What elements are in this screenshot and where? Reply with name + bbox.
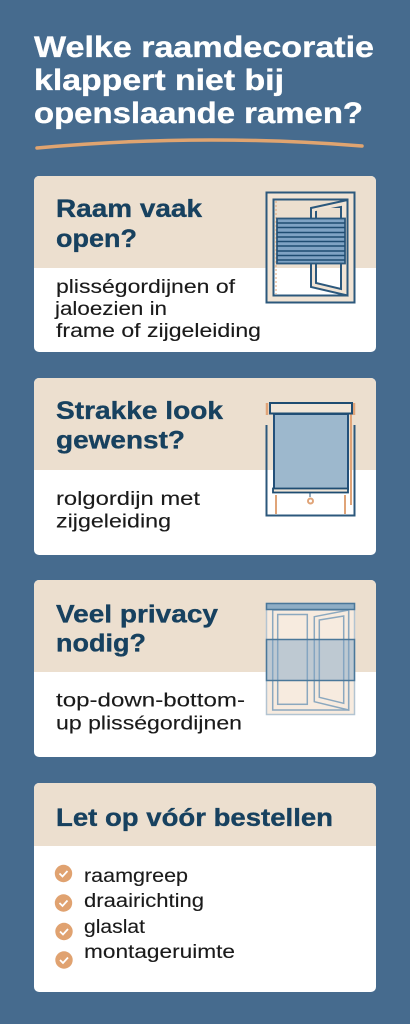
item: raamgreep: raamgreep	[84, 866, 188, 887]
text: plissegordijnen of jaloezien: plisségordijnen of	[56, 277, 236, 298]
heading: strakke look gewenst	[56, 397, 223, 454]
item: draairichting	[55, 891, 204, 912]
icon: top-down bottom-up blind	[266, 604, 354, 714]
item: glaslat: glaslat	[84, 917, 146, 938]
title: openslaande ramen?	[34, 97, 363, 130]
heading: strakke look gewenst: Strakke look	[56, 397, 223, 425]
title: Welke raamdecoratie	[34, 31, 374, 64]
panel: strakke look gewenst	[34, 378, 376, 555]
text: rolgordijn met zijgeleiding: zijgeleiding	[56, 512, 171, 532]
text: rolgordijn met zijgeleiding	[56, 489, 201, 532]
heading: veel privacy nodig: Veel privacy	[56, 600, 218, 628]
text: top-down-bottom-up: top-down-bottom-	[56, 690, 245, 712]
heading: raam vaak open	[56, 195, 202, 253]
item: montageruimte: montageruimte	[84, 942, 235, 963]
checklist	[55, 865, 235, 969]
heading: strakke look gewenst: gewenst?	[56, 426, 185, 454]
heading: let op voor bestellen: Let op vóór bestellen	[56, 804, 333, 832]
heading: veel privacy nodig: nodig?	[56, 630, 146, 658]
text: plissegordijnen of jaloezien: frame of zijgeleiding	[56, 321, 261, 342]
item: raamgreep	[55, 865, 188, 887]
panel: let op voor bestellen	[34, 783, 376, 992]
heading: raam vaak open: Raam vaak	[56, 195, 202, 223]
heading: veel privacy nodig	[56, 600, 218, 658]
title: klappert niet bij	[34, 64, 284, 97]
text: rolgordijn met zijgeleiding: rolgordijn met	[56, 489, 201, 510]
icon: roller blind with side guides	[266, 403, 354, 516]
item: montageruimte	[55, 942, 235, 969]
icon: pleated blind on open window	[266, 192, 354, 302]
title	[34, 31, 374, 130]
heading: raam vaak open: open?	[56, 225, 137, 253]
title underline	[37, 140, 362, 148]
text: plissegordijnen of jaloezien: jaloezien in	[54, 299, 167, 320]
item: glaslat	[55, 917, 146, 940]
panel: veel privacy nodig	[34, 580, 376, 757]
text: top-down-bottom-up: up plisségordijnen	[56, 714, 242, 734]
text: plissegordijnen of jaloezien	[54, 277, 261, 342]
item: draairichting: draairichting	[84, 891, 204, 912]
panel: raam vaak open	[34, 176, 376, 352]
text: top-down-bottom-up	[56, 690, 245, 734]
